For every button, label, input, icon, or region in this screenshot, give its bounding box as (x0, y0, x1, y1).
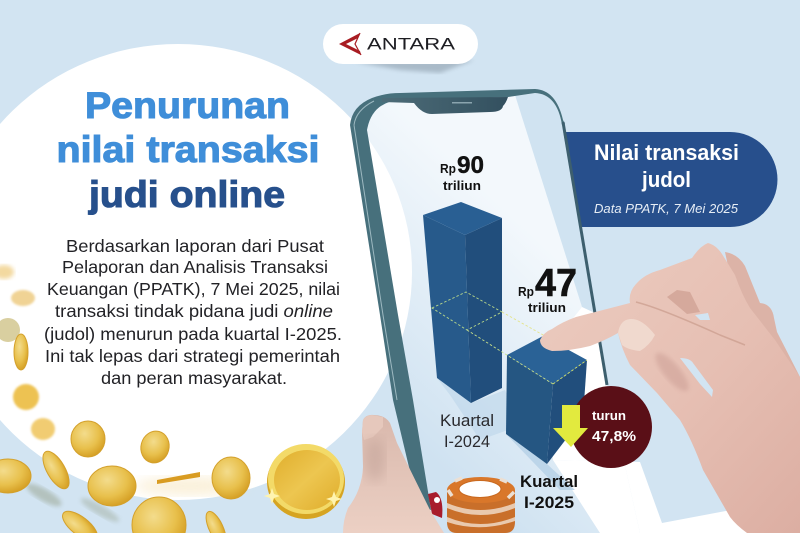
logo: ANTARA: ANTARA (367, 34, 456, 54)
axis label: Kuartal I-2025 (520, 472, 578, 512)
body text: (judol) menurun pada kuartal I-2025. (44, 324, 342, 344)
axis label: Kuartal I-2025: Kuartal (520, 472, 578, 491)
title (56, 85, 320, 215)
body text: Keuangan (PPATK), 7 Mei 2025, nilai (47, 279, 340, 299)
callout: turun 47,8% (570, 386, 652, 468)
panel: Nilai transaksi judol: Nilai transaksi (594, 140, 739, 165)
value label: Rp90 triliun: triliun (443, 178, 481, 193)
value label: Rp90 triliun: 90 (457, 152, 484, 179)
body text (44, 236, 342, 388)
right hand pointing (540, 243, 800, 533)
smartphone (350, 89, 640, 532)
falling gold coins (0, 265, 345, 533)
white circle backdrop (0, 44, 412, 500)
panel: Nilai transaksi judol: judol (641, 167, 691, 192)
poker chips (428, 477, 515, 533)
body text: Pelaporan dan Analisis Transaksi (62, 257, 328, 277)
body text: Ini tak lepas dari strategi pemerintah (45, 346, 340, 366)
panel: Nilai transaksi judol (560, 132, 777, 227)
bar: Kuartal I-2025 (506, 336, 587, 490)
value label: Rp47 triliun: Rp (518, 284, 534, 299)
bar: Kuartal I-2024 (423, 202, 522, 440)
logo: ANTARA (323, 24, 478, 73)
callout: turun 47,8%: turun (592, 408, 626, 423)
title: judi online (88, 174, 285, 215)
icon: down arrow (553, 405, 588, 447)
value label: Rp47 triliun (518, 262, 577, 315)
axis label: Kuartal I-2024 (440, 411, 494, 451)
dashed projection lines (432, 292, 587, 384)
callout: turun 47,8%: 47,8% (592, 428, 636, 445)
axis label: Kuartal I-2025: I-2025 (524, 493, 574, 512)
axis label: Kuartal I-2024: I-2024 (444, 432, 490, 451)
panel: Nilai transaksi judol: Data PPATK, 7 Mei 2025 (594, 201, 739, 216)
body text: Berdasarkan laporan dari Pusat (66, 236, 324, 256)
title: nilai transaksi (56, 129, 320, 170)
value label: Rp47 triliun: 47 (535, 262, 577, 305)
body text: transaksi tindak pidana judi online (55, 301, 333, 321)
axis label: Kuartal I-2024: Kuartal (440, 411, 494, 430)
value label: Rp90 triliun (440, 152, 484, 193)
body text: dan peran masyarakat. (101, 368, 287, 388)
left hand holding phone (343, 415, 444, 533)
value label: Rp47 triliun: triliun (528, 300, 566, 315)
title: Penurunan (85, 85, 290, 126)
white diagonal band at lower right (553, 460, 800, 533)
value label: Rp90 triliun: Rp (440, 161, 456, 176)
